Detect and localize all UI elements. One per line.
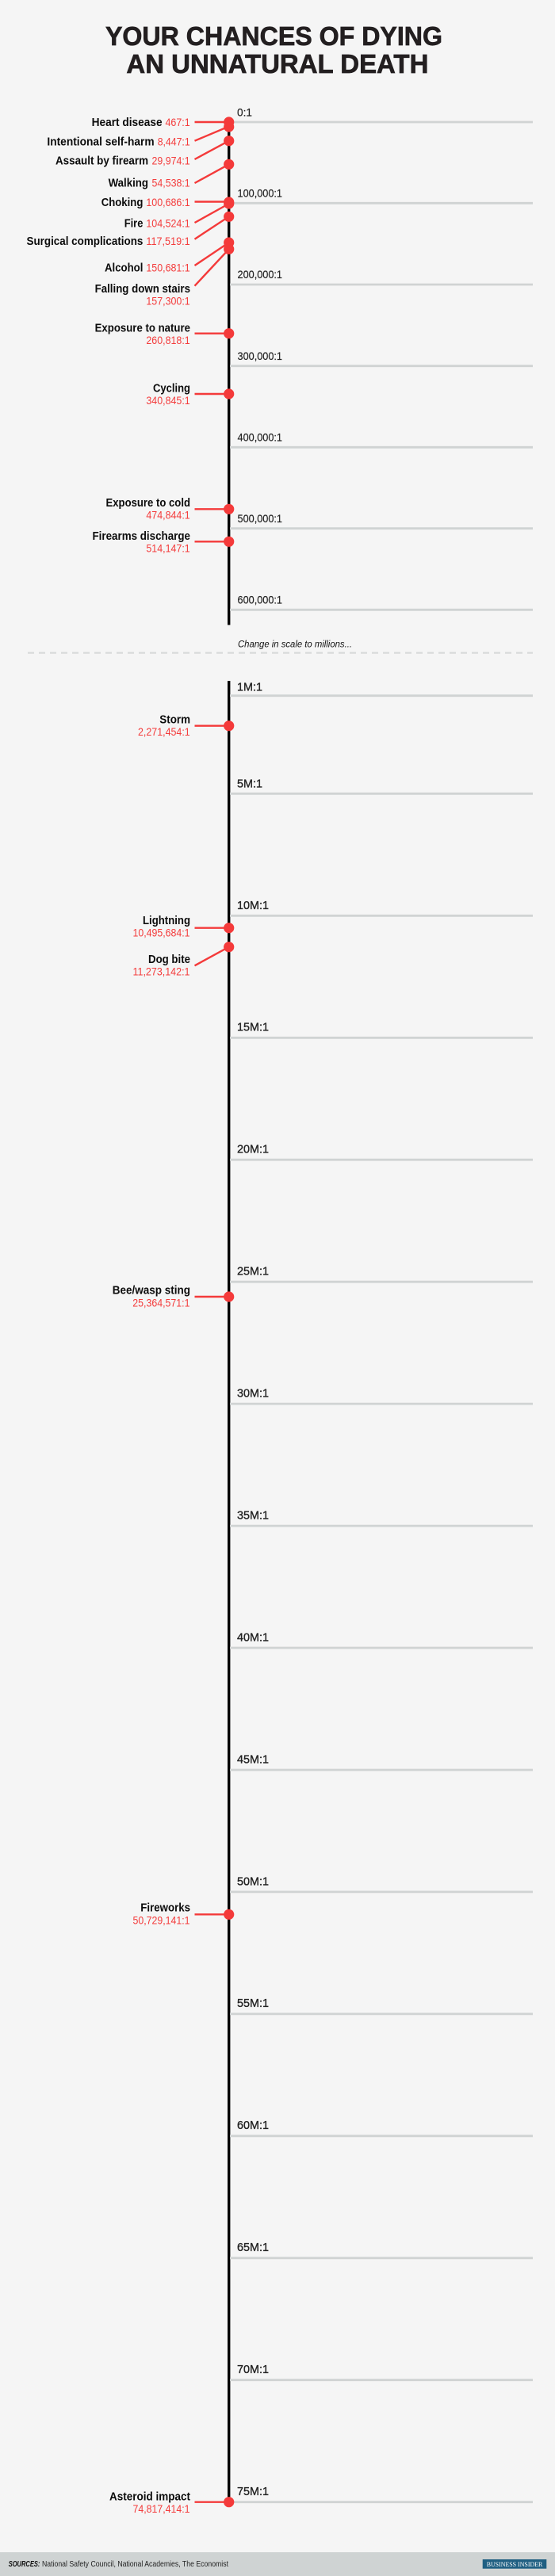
event: falling down stairs <box>95 244 234 308</box>
event: surgical complications <box>27 212 234 248</box>
event: asteroid impact <box>109 2490 234 2515</box>
footer: sources: SOURCES: <box>9 2559 40 2569</box>
event: fireworks: Fireworks <box>140 1902 190 1915</box>
event: fireworks <box>133 1902 234 1926</box>
event: alcohol <box>105 237 234 275</box>
event: choking <box>101 196 234 209</box>
event: storm: 2,271,454:1 <box>138 725 190 738</box>
event: assault by firearm: 29,974:1 <box>152 154 190 166</box>
scale: millions gridlines and labels: 15M:1 <box>237 1022 269 1034</box>
scale: thousands gridlines and labels: 400,000:1 <box>238 431 282 444</box>
event: walking <box>109 159 234 190</box>
scale: millions gridlines and labels: 55M:1 <box>237 1997 269 2010</box>
event: exposure to cold: Exposure to cold <box>106 497 190 510</box>
event: walking: 54,538:1 <box>152 177 190 189</box>
scale: millions gridlines and labels: 10M:1 <box>237 900 269 912</box>
event: lightning <box>133 915 234 939</box>
scale: thousands gridlines and labels: 500,000:1 <box>238 513 282 525</box>
event: assault by firearm <box>56 136 234 168</box>
event: cycling: Cycling <box>153 382 190 395</box>
scale: thousands gridlines and labels: 300,000:1 <box>238 350 282 362</box>
event: fire <box>124 198 234 231</box>
event: exposure to cold <box>106 497 234 522</box>
event: falling down stairs: 157,300:1 <box>146 295 190 308</box>
scale: millions gridlines and labels: 1M:1 <box>237 682 262 694</box>
event: exposure to cold: 474,844:1 <box>146 509 190 522</box>
note: change in scale: Change in scale to millions... <box>238 639 352 650</box>
event: intentional self-harm <box>47 121 234 148</box>
event: falling down stairs: Falling down stairs <box>95 283 190 296</box>
scale: millions gridlines and labels: 60M:1 <box>237 2119 269 2132</box>
axis: thousands <box>228 122 230 625</box>
event: bee/wasp sting: Bee/wasp sting <box>113 1285 190 1298</box>
event: fire: Fire <box>124 218 143 231</box>
scale: thousands gridlines and labels: 100,000:1 <box>238 187 282 200</box>
scale: millions gridlines and labels: 75M:1 <box>237 2486 269 2498</box>
event: alcohol: Alcohol <box>105 262 143 275</box>
event: heart disease: 467:1 <box>165 116 190 128</box>
event: firearms discharge: 514,147:1 <box>146 542 190 555</box>
event: storm <box>138 713 234 738</box>
event: firearms discharge: Firearms discharge <box>92 530 190 543</box>
scale: millions gridlines and labels <box>230 682 533 2502</box>
event: fire: 104,524:1 <box>146 217 190 230</box>
logo: Business Insider <box>483 2559 546 2569</box>
event: choking: Choking <box>101 197 143 209</box>
footer: sources <box>0 2552 555 2576</box>
event: exposure to nature: Exposure to nature <box>95 322 190 334</box>
scale: millions gridlines and labels: 40M:1 <box>237 1631 269 1644</box>
event: intentional self-harm: 8,447:1 <box>158 135 190 147</box>
title: AN UNNATURAL DEATH <box>126 50 428 79</box>
scale: millions gridlines and labels: 65M:1 <box>237 2242 269 2254</box>
event: lightning: 10,495,684:1 <box>133 927 190 939</box>
scale: millions gridlines and labels: 20M:1 <box>237 1143 269 1156</box>
event: firearms discharge <box>92 530 234 555</box>
scale: thousands gridlines and labels: 0:1 <box>237 106 252 118</box>
scale: millions gridlines and labels: 70M:1 <box>237 2364 269 2376</box>
footer: sources: National Safety Council, National Academies, The Economist <box>42 2559 228 2569</box>
scale: millions gridlines and labels: 25M:1 <box>237 1266 269 1278</box>
event: alcohol: 150,681:1 <box>146 262 190 274</box>
scale: millions gridlines and labels: 35M:1 <box>237 1509 269 1522</box>
event: walking: Walking <box>109 178 148 190</box>
logo: Business Insider: BUSINESS INSIDER <box>487 2561 543 2568</box>
event: dog bite: Dog bite <box>148 954 190 966</box>
event: storm: Storm <box>159 713 190 726</box>
event: exposure to nature <box>95 322 234 346</box>
event: dog bite: 11,273,142:1 <box>133 965 190 978</box>
scale: thousands gridlines and labels: 600,000:1 <box>238 594 282 606</box>
event: fireworks: 50,729,141:1 <box>133 1913 190 1926</box>
event: surgical complications: 117,519:1 <box>146 235 190 247</box>
event: surgical complications: Surgical complications <box>27 235 143 248</box>
event: bee/wasp sting: 25,364,571:1 <box>132 1296 190 1309</box>
event: heart disease <box>92 116 234 129</box>
scale: thousands gridlines and labels: 200,000:1 <box>238 269 282 281</box>
event: bee/wasp sting <box>113 1285 234 1309</box>
title <box>105 22 442 79</box>
scale: millions gridlines and labels: 50M:1 <box>237 1875 269 1888</box>
scale: thousands gridlines and labels <box>230 106 533 610</box>
scale: millions gridlines and labels: 5M:1 <box>237 778 262 790</box>
event: exposure to nature: 260,818:1 <box>146 334 190 346</box>
event: cycling: 340,845:1 <box>146 394 190 407</box>
event: asteroid impact: Asteroid impact <box>109 2490 190 2503</box>
event: dog bite <box>133 942 234 978</box>
event: lightning: Lightning <box>143 915 190 927</box>
event: asteroid impact: 74,817,414:1 <box>133 2502 190 2515</box>
title: YOUR CHANCES OF DYING <box>105 22 442 52</box>
event: assault by firearm: Assault by firearm <box>56 155 148 168</box>
event: cycling <box>146 382 234 407</box>
axis: millions <box>228 681 230 2502</box>
event: heart disease: Heart disease <box>92 117 163 129</box>
scale: millions gridlines and labels: 30M:1 <box>237 1387 269 1400</box>
event: choking: 100,686:1 <box>146 196 190 208</box>
scale: millions gridlines and labels: 45M:1 <box>237 1753 269 1766</box>
event: intentional self-harm: Intentional self-harm <box>47 136 155 148</box>
